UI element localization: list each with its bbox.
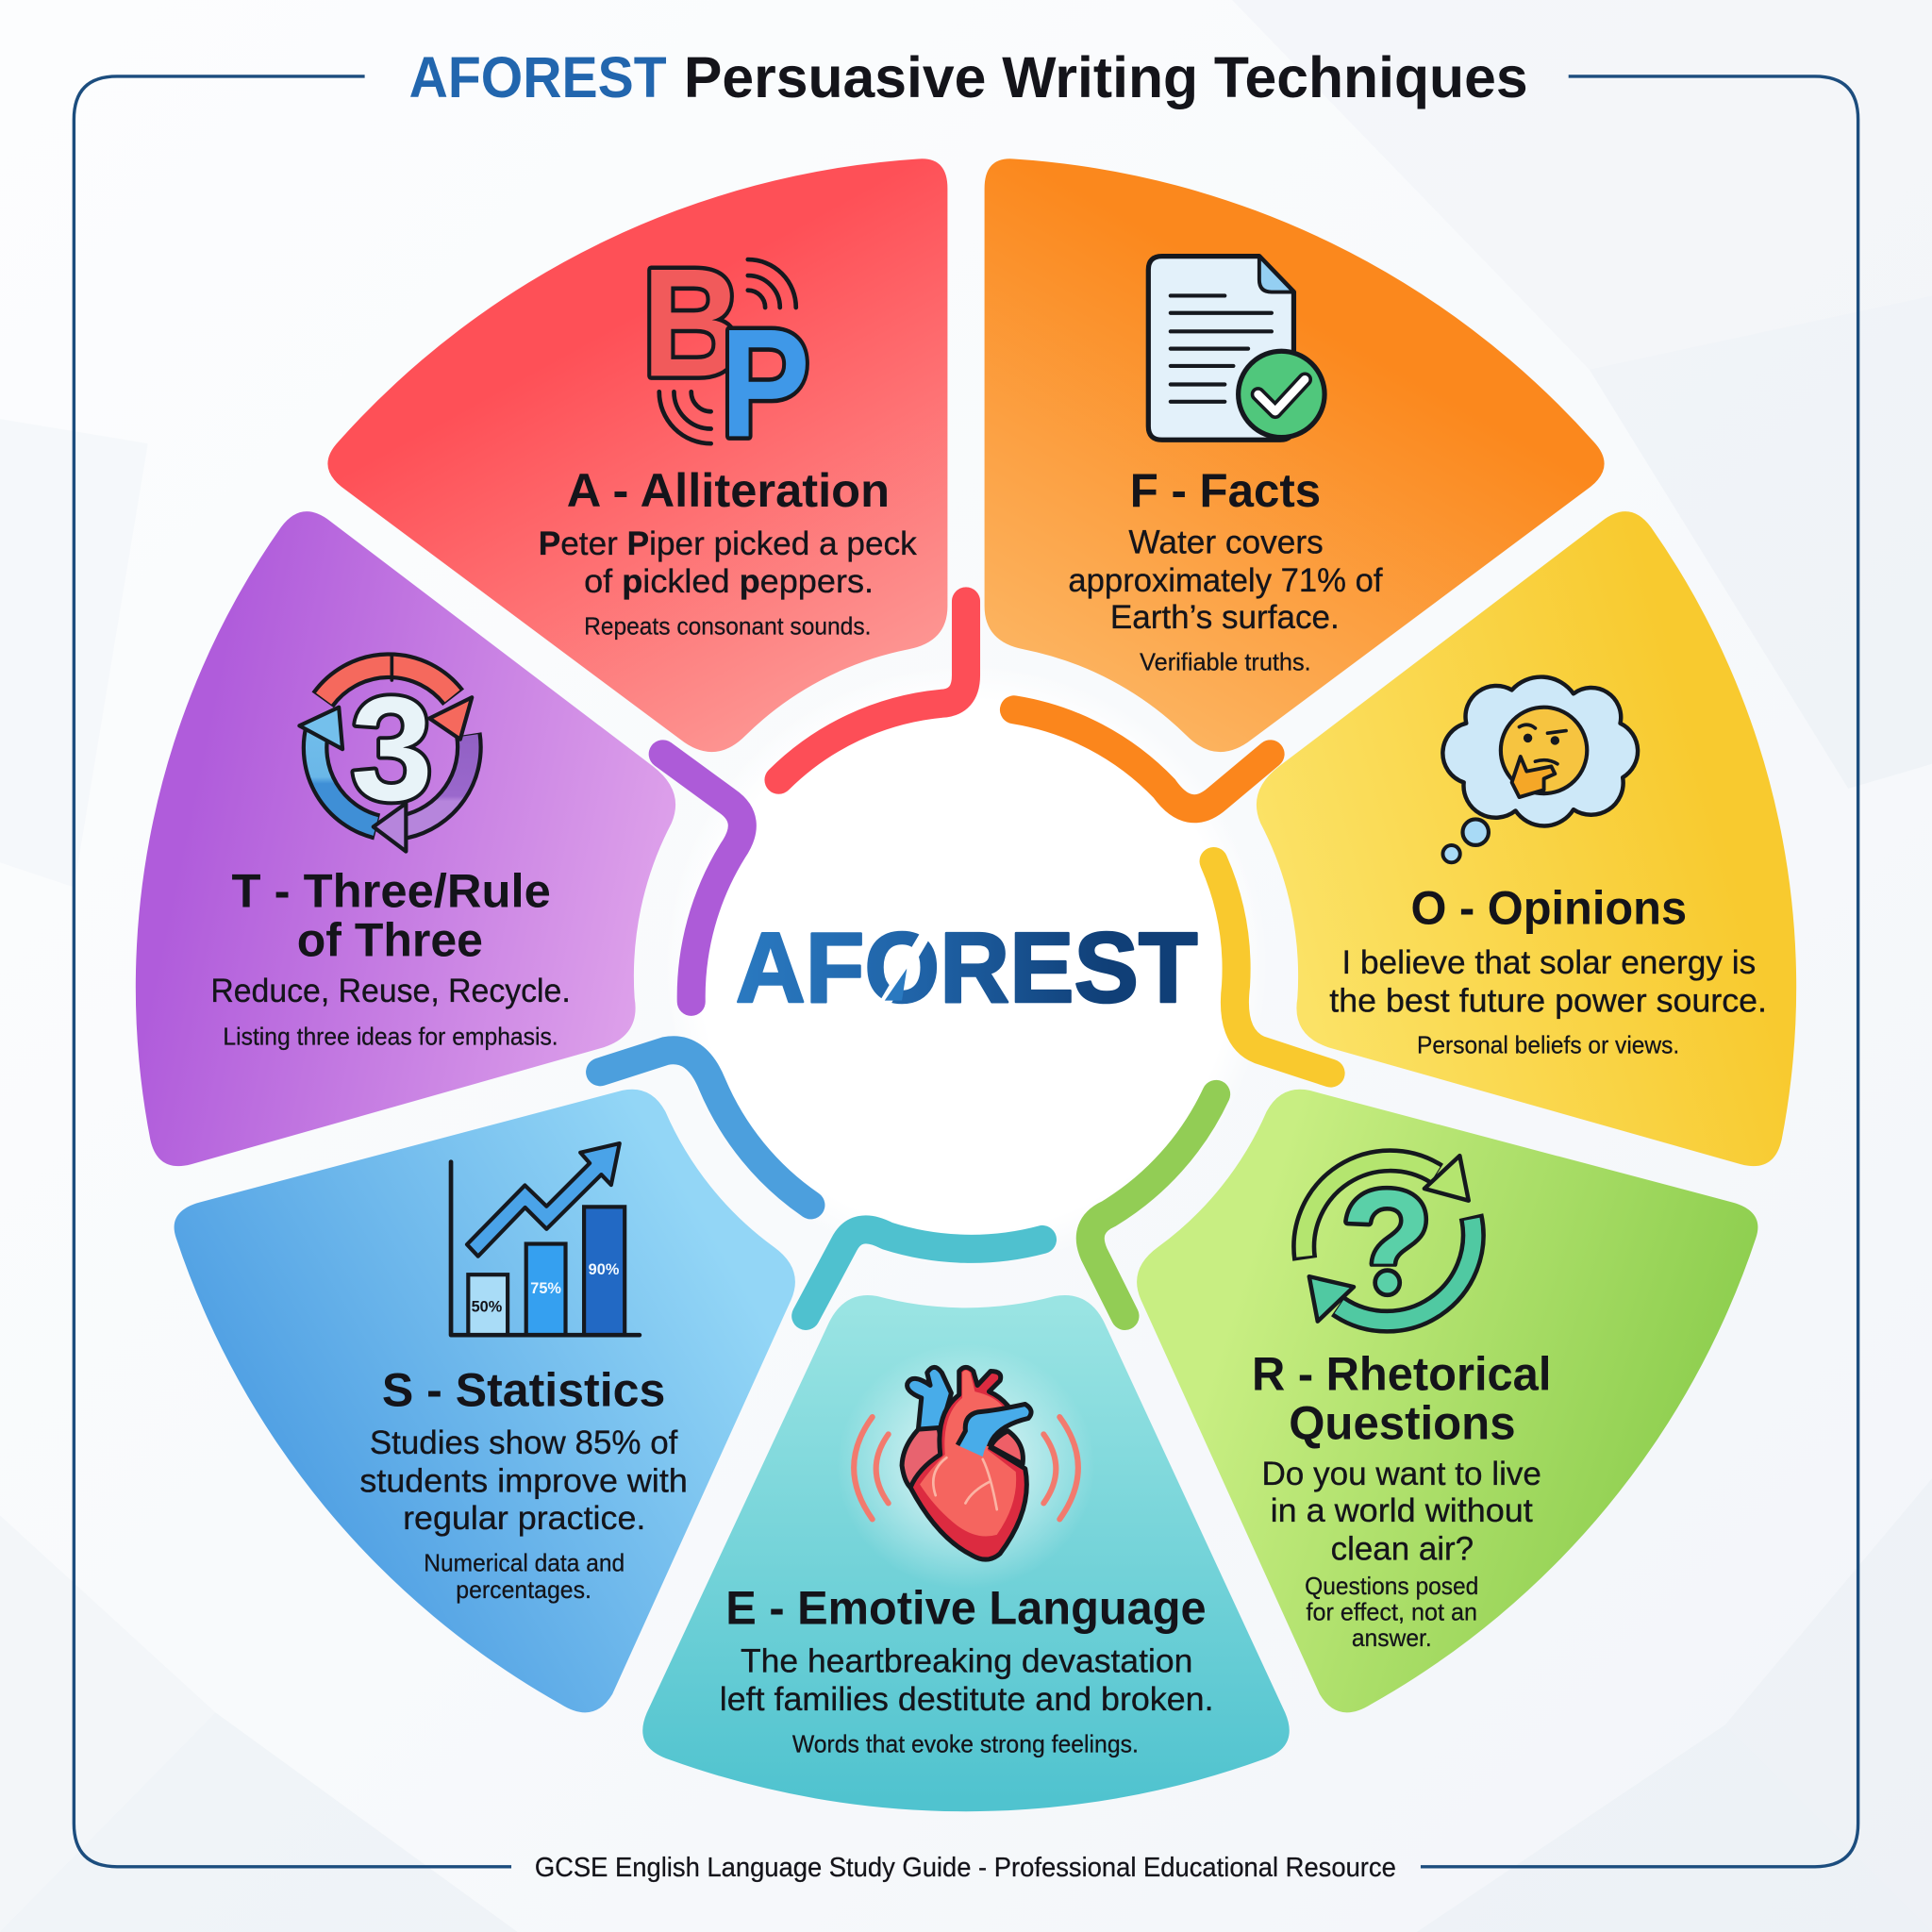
title: Persuasive Writing Techniques bbox=[684, 45, 1528, 110]
heading: S - Statistics bbox=[382, 1363, 665, 1416]
icon: bar chart with rising arrow: 50% bbox=[472, 1298, 503, 1315]
definition bbox=[424, 1548, 625, 1604]
panel: A - Alliteration bbox=[327, 158, 947, 752]
connector: blue bbox=[600, 1050, 810, 1205]
example text bbox=[1068, 524, 1383, 636]
definition: Verifiable truths. bbox=[1140, 648, 1311, 676]
heading: R - Rhetorical bbox=[1252, 1347, 1551, 1400]
example text: regular practice. bbox=[403, 1500, 645, 1537]
example text: approximately 71% of bbox=[1068, 562, 1383, 599]
example text: students improve with bbox=[359, 1463, 688, 1500]
icon: question mark with cycle arrows: ? bbox=[1341, 1159, 1433, 1327]
definition: Numerical data and bbox=[424, 1548, 625, 1576]
connector: purple bbox=[663, 754, 742, 1002]
connector: yellow bbox=[1214, 861, 1331, 1074]
icon: question mark with cycle arrows bbox=[1304, 1156, 1474, 1327]
definition: for effect, not an bbox=[1306, 1598, 1477, 1626]
icon: bar chart with rising arrow: 75% bbox=[530, 1280, 561, 1297]
heading: Questions bbox=[1289, 1397, 1516, 1450]
connector: green bbox=[1091, 1094, 1216, 1316]
panel: E - Emotive Language bbox=[642, 1295, 1290, 1811]
connector: teal bbox=[806, 1229, 1042, 1316]
heading: F - Facts bbox=[1130, 464, 1321, 517]
panel: F - Facts bbox=[985, 158, 1605, 752]
example text: I believe that solar energy is bbox=[1341, 944, 1756, 981]
definition: Personal beliefs or views. bbox=[1417, 1031, 1679, 1059]
icon: three arrows around number 3 bbox=[299, 656, 472, 852]
example text: Reduce, Reuse, Recycle. bbox=[210, 973, 571, 1009]
icon: B and P letters with sound waves bbox=[641, 236, 810, 469]
definition bbox=[1305, 1572, 1478, 1652]
example text: of pickled peppers. bbox=[584, 563, 874, 600]
example text: the best future power source. bbox=[1329, 982, 1767, 1019]
example text: in a world without bbox=[1271, 1492, 1533, 1529]
example text: The heartbreaking devastation bbox=[741, 1642, 1192, 1679]
heading: T - Three/Rule bbox=[232, 864, 551, 917]
footer: GCSE English Language Study Guide - Professional Educational Resource bbox=[535, 1853, 1396, 1883]
heading bbox=[232, 864, 551, 967]
example text: Earth’s surface. bbox=[1110, 599, 1340, 636]
panel: O - Opinions bbox=[1257, 511, 1796, 1166]
panel: T - Three/Rule of Three bbox=[136, 511, 675, 1166]
example text: Studies show 85% of bbox=[370, 1424, 678, 1461]
definition: answer. bbox=[1352, 1624, 1432, 1652]
example text: clean air? bbox=[1331, 1531, 1474, 1568]
example text bbox=[720, 1642, 1214, 1718]
example text: left families destitute and broken. bbox=[720, 1681, 1214, 1718]
connector: red bbox=[778, 601, 966, 780]
icon: thought cloud with thinking face bbox=[1442, 677, 1638, 862]
example text: Water covers bbox=[1128, 524, 1324, 560]
definition: percentages. bbox=[456, 1575, 591, 1604]
center circle bbox=[664, 664, 1268, 1268]
panel: S - Statistics bbox=[175, 1090, 795, 1712]
icon: beating heart bbox=[837, 1343, 1095, 1590]
icon: document with check bbox=[1148, 257, 1324, 440]
title: AFOREST bbox=[409, 45, 667, 110]
definition: Words that evoke strong feelings. bbox=[792, 1729, 1139, 1757]
definition: Listing three ideas for emphasis. bbox=[223, 1023, 558, 1051]
icon: bar chart with rising arrow: 90% bbox=[589, 1261, 620, 1278]
connector: orange bbox=[1014, 709, 1271, 808]
icon: B and P letters with sound waves: B bbox=[641, 236, 741, 408]
example text: Peter Piper picked a peck bbox=[539, 525, 917, 562]
center logo: AFOREST: AFOREST bbox=[736, 912, 1198, 1024]
example text bbox=[359, 1424, 688, 1537]
example text bbox=[1261, 1456, 1541, 1568]
icon: three arrows around number 3: 3 bbox=[351, 667, 433, 832]
example text bbox=[539, 525, 917, 600]
example text: Do you want to live bbox=[1261, 1456, 1541, 1492]
heading: A - Alliteration bbox=[567, 464, 890, 517]
heading: of Three bbox=[297, 914, 483, 967]
icon: B and P letters with sound waves: P bbox=[720, 296, 810, 469]
heading: O - Opinions bbox=[1411, 882, 1687, 935]
definition: Questions posed bbox=[1305, 1572, 1478, 1600]
heading: E - Emotive Language bbox=[725, 1581, 1207, 1634]
definition: Repeats consonant sounds. bbox=[584, 612, 871, 641]
example text bbox=[1329, 944, 1767, 1019]
heading bbox=[1252, 1347, 1551, 1450]
panel: R - Rhetorical Questions bbox=[1137, 1090, 1757, 1712]
icon: bar chart with rising arrow bbox=[451, 1143, 640, 1335]
